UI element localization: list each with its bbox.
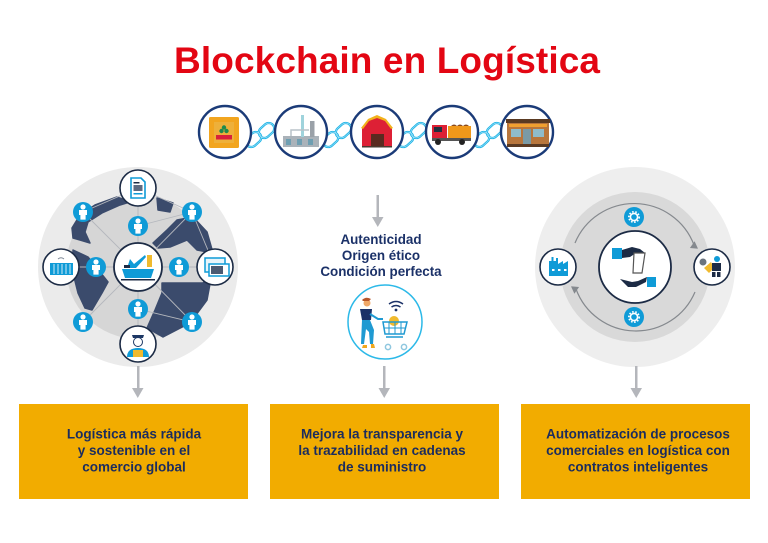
arrow: globe to box 1 bbox=[132, 366, 144, 398]
panel: box 3 bbox=[521, 404, 750, 499]
box 3 text: contratos inteligentes bbox=[568, 460, 708, 474]
icon: store bbox=[501, 106, 553, 158]
arrow: cart to box 2 bbox=[378, 366, 390, 398]
box 3 text: Automatización de procesos bbox=[546, 426, 730, 442]
inner disc bbox=[560, 192, 710, 342]
box 2 text: de suministro bbox=[338, 460, 426, 474]
icon: gear top bbox=[624, 207, 644, 227]
icon: screens node bbox=[197, 249, 233, 285]
chain link 2 bbox=[321, 121, 353, 149]
chain link 4 bbox=[472, 121, 504, 149]
box 2 text bbox=[298, 426, 466, 474]
icon: factory bbox=[275, 106, 327, 158]
icon: truck bbox=[426, 106, 478, 158]
icon: shopper with cart bbox=[348, 285, 422, 359]
icon: document node bbox=[120, 170, 156, 206]
icon: ship centre node bbox=[114, 243, 162, 291]
arrow: chain to centre bbox=[372, 195, 384, 227]
outer grey disc bbox=[38, 167, 238, 367]
arrow: cycle to box 3 bbox=[630, 366, 642, 398]
chain link 1 bbox=[244, 121, 276, 149]
box 2 text: la trazabilidad en cadenas bbox=[298, 443, 466, 458]
icon: gear bottom bbox=[624, 307, 644, 327]
icon: red barn bbox=[351, 106, 403, 158]
icon: courier node bbox=[694, 249, 730, 285]
text block: attributes bbox=[320, 232, 442, 279]
panel: box 1 bbox=[19, 404, 248, 499]
box 1 text bbox=[67, 426, 202, 474]
box 1 text: comercio global bbox=[82, 460, 186, 474]
supply chain icons bbox=[199, 106, 553, 158]
text block: attributes: Condición perfecta bbox=[320, 264, 442, 279]
network lines bbox=[61, 188, 215, 343]
icon: customs officer node bbox=[120, 326, 156, 362]
icon: person nodes bbox=[73, 202, 202, 332]
outer disc bbox=[535, 167, 735, 367]
panel: global logistics network bbox=[38, 167, 238, 367]
box 1 text: Logística más rápida bbox=[67, 426, 202, 442]
chain link 3 bbox=[396, 121, 428, 149]
icon: factory node bbox=[540, 249, 576, 285]
text block: attributes: Origen ético bbox=[342, 248, 420, 263]
text block: attributes: Autenticidad bbox=[340, 232, 422, 247]
box 3 text: comerciales en logística con bbox=[546, 443, 730, 458]
box 1 text: y sostenible en el bbox=[78, 443, 190, 458]
cycle arrows bbox=[572, 204, 697, 331]
title: Blockchain en Logística bbox=[174, 40, 600, 81]
icon: handover centre node bbox=[599, 231, 671, 303]
globe bbox=[66, 195, 213, 339]
icon: container node bbox=[43, 249, 79, 285]
box 2 text: Mejora la transparencia y bbox=[301, 426, 464, 442]
box 3 text bbox=[546, 426, 730, 474]
panel: box 2 bbox=[270, 404, 499, 499]
panel: smart contracts cycle bbox=[535, 167, 735, 367]
icon: fertilizer sack bbox=[199, 106, 251, 158]
